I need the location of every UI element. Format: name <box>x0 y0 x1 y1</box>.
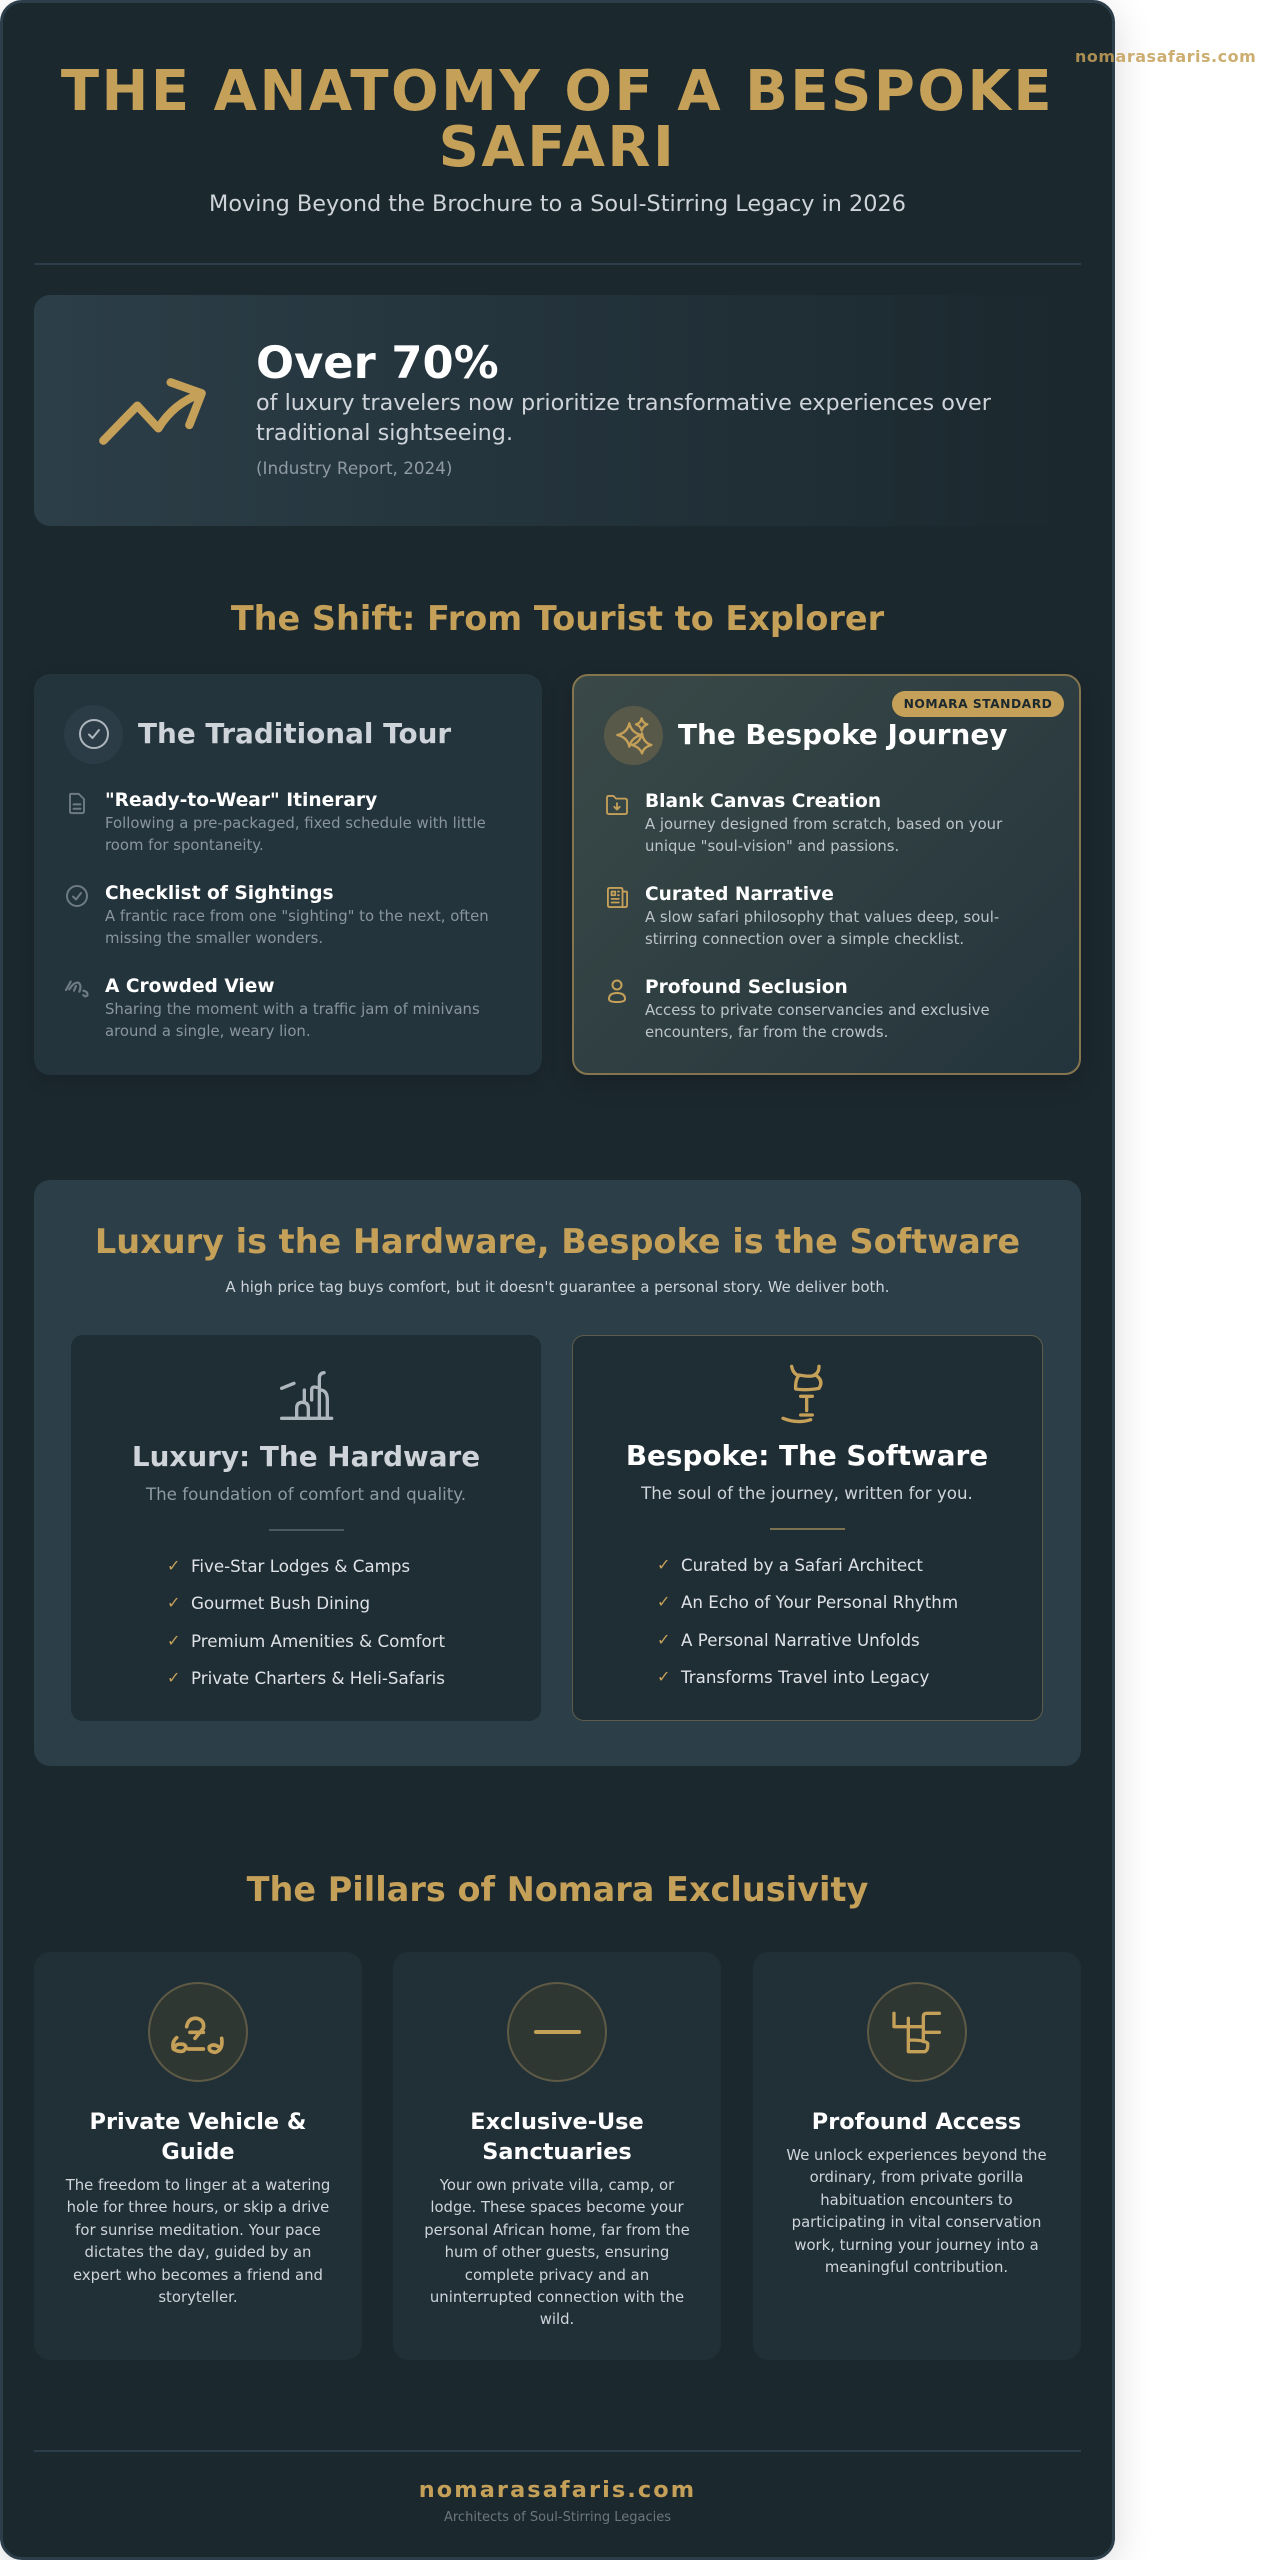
feature list <box>167 1556 445 1688</box>
statistic description: of luxury travelers now prioritize transformative experiences over <box>256 390 991 416</box>
item: crowded view: A Crowded View <box>105 976 275 997</box>
item: blank canvas: unique "soul-vision" and passions. <box>645 837 899 855</box>
item: ready to wear <box>69 790 486 854</box>
item: checklist: Checklist of Sightings <box>105 883 334 904</box>
card heading: The Bespoke Journey <box>678 718 1007 751</box>
statistic heading: Over 70% <box>256 336 499 389</box>
subheading: The foundation of comfort and quality. <box>146 1484 466 1504</box>
title: THE ANATOMY OF A BESPOKE <box>61 59 1054 124</box>
feature list: Private Charters & Heli-Safaris <box>191 1668 445 1688</box>
feature list: ✓ <box>657 1667 670 1686</box>
item: checklist <box>66 883 489 947</box>
heading: pillars: The Pillars of Nomara Exclusivity <box>247 1870 868 1909</box>
heading: Bespoke: The Software <box>626 1439 988 1472</box>
item: curated narrative <box>607 884 999 948</box>
panel: profound access <box>752 1952 1080 2360</box>
statistic source: (Industry Report, 2024) <box>256 458 452 478</box>
panel: hardware vs software <box>34 1180 1081 1766</box>
pillar description: hum of other guests, ensuring <box>445 2243 669 2261</box>
feature list: ✓ <box>657 1630 670 1649</box>
feature list: Transforms Travel into Legacy <box>681 1667 929 1687</box>
pillar description: The freedom to linger at a watering <box>66 2176 330 2194</box>
icon: access <box>867 1982 967 2082</box>
feature list: An Echo of Your Personal Rhythm <box>681 1592 958 1612</box>
icon: document <box>69 792 85 814</box>
pillar title: Private Vehicle & <box>90 2109 306 2135</box>
statistic description: traditional sightseeing. <box>256 420 513 446</box>
pillar description: ordinary, from private gorilla <box>810 2168 1023 2186</box>
icon: check circle <box>79 719 109 749</box>
pillar title: Guide <box>161 2139 235 2165</box>
icon: sparkle badge <box>604 706 663 765</box>
feature list: Five-Star Lodges & Camps <box>191 1556 410 1576</box>
pillar description: We unlock experiences beyond the <box>786 2146 1047 2164</box>
pillar title <box>470 2109 644 2165</box>
pillar description: lodge. These spaces become your <box>430 2198 684 2216</box>
pillar description: dictates the day, guided by an <box>85 2243 311 2261</box>
icon: software <box>781 1364 823 1424</box>
feature list: ✓ <box>657 1555 670 1574</box>
card: bespoke software <box>572 1335 1043 1721</box>
pillar title: Exclusive-Use <box>470 2109 644 2135</box>
section intro: A high price tag buys comfort, but it doesn't guarantee a personal story. We deliver both. <box>226 1278 890 1296</box>
heading: Luxury: The Hardware <box>132 1440 480 1473</box>
item: profound seclusion: Profound Seclusion <box>645 977 848 998</box>
pillar title <box>90 2109 306 2165</box>
pillar description: uninterrupted connection with the <box>430 2288 684 2306</box>
panel: private vehicle <box>34 1952 362 2360</box>
icon: check circle small <box>66 885 88 907</box>
icon: dash <box>507 1982 607 2082</box>
item: ready to wear: "Ready-to-Wear" Itinerary <box>105 790 377 811</box>
item: curated narrative: A slow safari philosophy that values deep, soul- <box>645 908 999 926</box>
item: checklist: missing the smaller wonders. <box>105 929 323 947</box>
icon: crowd squiggle <box>64 980 88 998</box>
pillar description: for sunrise meditation. Your pace <box>75 2221 321 2239</box>
pillar title: Profound Access <box>812 2109 1021 2135</box>
item: crowded view: Sharing the moment with a traffic jam of minivans <box>105 1000 480 1018</box>
icon: check badge <box>64 705 123 764</box>
section heading: Luxury is the Hardware, Bespoke is the Software <box>95 1222 1020 1261</box>
panel: hero statistic <box>34 295 1081 526</box>
icon: person <box>608 980 626 1003</box>
pillar description <box>424 2176 690 2328</box>
pillar description: wild. <box>540 2310 574 2328</box>
panel: bespoke journey <box>572 674 1081 1075</box>
item: blank canvas: A journey designed from scratch, based on your <box>645 815 1002 833</box>
card heading: The Traditional Tour <box>138 717 451 750</box>
item: blank canvas <box>606 791 1002 855</box>
icon: newspaper <box>607 887 628 908</box>
item: ready to wear: room for spontaneity. <box>105 836 264 854</box>
panel: exclusive use <box>393 1952 721 2360</box>
footer tagline: Architects of Soul-Stirring Legacies <box>444 2510 671 2525</box>
feature list <box>657 1555 958 1687</box>
item: profound seclusion: encounters, far from the crowds. <box>645 1023 888 1041</box>
pillar title: Sanctuaries <box>482 2139 632 2165</box>
pillar description <box>66 2176 330 2306</box>
item: ready to wear: Following a pre-packaged, fixed schedule with little <box>105 814 486 832</box>
title <box>61 59 1054 180</box>
pillar description: work, turning your journey into a <box>794 2236 1039 2254</box>
pillar description: complete privacy and an <box>465 2266 649 2284</box>
item: profound seclusion: Access to private conservancies and exclusive <box>645 1001 990 1019</box>
icon: trending arrow <box>99 378 206 445</box>
item: curated narrative: Curated Narrative <box>645 884 834 905</box>
item: profound seclusion <box>608 977 990 1041</box>
website tag: nomarasafaris.com <box>1075 47 1256 66</box>
feature list: ✓ <box>167 1593 180 1612</box>
feature list: ✓ <box>167 1668 180 1687</box>
icon: hardware <box>280 1371 334 1420</box>
badge: nomara standard <box>892 691 1064 717</box>
item: blank canvas: Blank Canvas Creation <box>645 791 881 812</box>
subtitle: Moving Beyond the Brochure to a Soul-Stirring Legacy in 2026 <box>209 191 906 217</box>
item: curated narrative: stirring connection over a simple checklist. <box>645 930 964 948</box>
panel: traditional tour <box>34 674 542 1075</box>
badge: nomara standard: NOMARA STANDARD <box>904 697 1052 711</box>
feature list: Premium Amenities & Comfort <box>191 1631 445 1651</box>
icon: folder <box>606 795 628 815</box>
icon: vehicle <box>148 1982 248 2082</box>
item: crowded view <box>64 724 648 1040</box>
heading: the shift: The Shift: From Tourist to Explorer <box>231 599 884 638</box>
subheading: The soul of the journey, written for you. <box>641 1483 973 1503</box>
feature list: ✓ <box>167 1631 180 1650</box>
statistic description <box>256 390 991 446</box>
pillar description: hole for three hours, or skip a drive <box>67 2198 329 2216</box>
pillar description: meaningful contribution. <box>825 2258 1008 2276</box>
pillar description: expert who becomes a friend and <box>73 2266 323 2284</box>
pillar description: Your own private villa, camp, or <box>440 2176 674 2194</box>
feature list: A Personal Narrative Unfolds <box>681 1630 920 1650</box>
feature list: ✓ <box>657 1592 670 1611</box>
pillar description <box>786 2146 1047 2276</box>
footer website: nomarasafaris.com <box>419 2477 696 2503</box>
pillar description: personal African home, far from the <box>424 2221 690 2239</box>
item: checklist: A frantic race from one "sighting" to the next, often <box>105 907 489 925</box>
item: crowded view: around a single, weary lion. <box>105 1022 311 1040</box>
card: luxury hardware <box>71 1335 541 1721</box>
pillar description: storyteller. <box>158 2288 238 2306</box>
feature list: Curated by a Safari Architect <box>681 1555 923 1575</box>
pillar description: participating in vital conservation <box>792 2213 1041 2231</box>
icon: sparkles <box>616 717 652 754</box>
title: SAFARI <box>439 115 676 180</box>
pillar description: habituation encounters to <box>820 2191 1013 2209</box>
feature list: Gourmet Bush Dining <box>191 1593 370 1613</box>
feature list: ✓ <box>167 1556 180 1575</box>
